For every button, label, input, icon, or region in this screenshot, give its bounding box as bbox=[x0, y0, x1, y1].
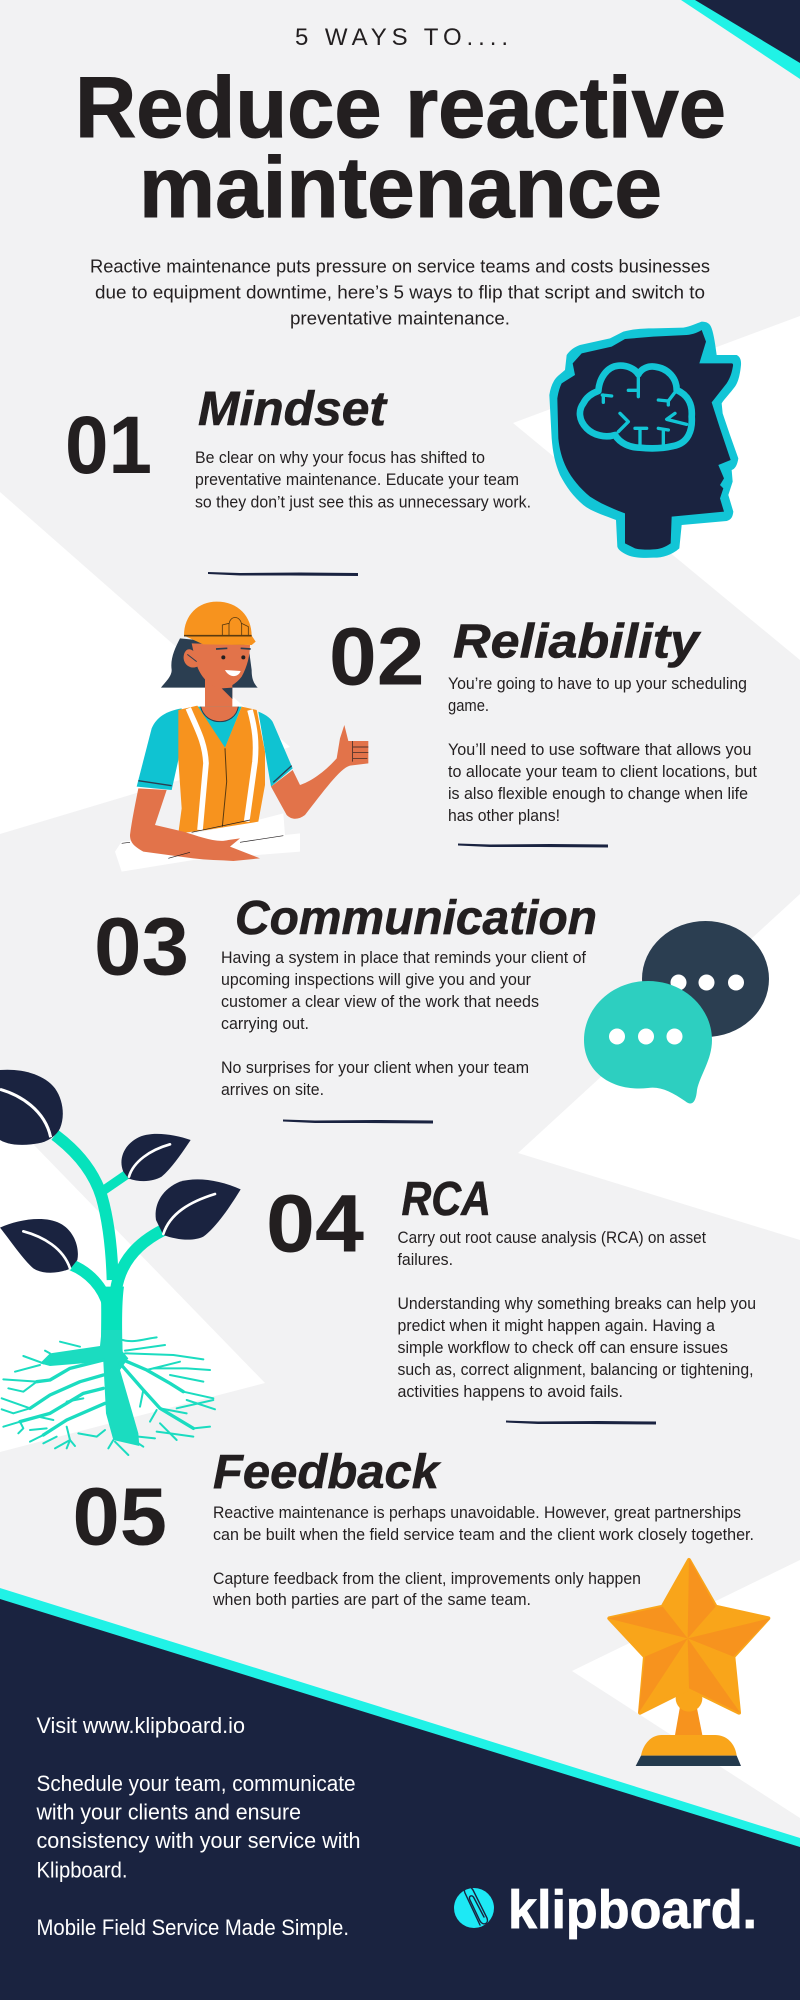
shirt bbox=[137, 708, 182, 790]
text block communication: Having a system in place that reminds your client of bbox=[221, 949, 586, 967]
heading rca: RCA bbox=[402, 1173, 491, 1226]
right arm and thumb bbox=[271, 725, 368, 819]
panel: 05 feedback bbox=[72, 1446, 754, 1609]
text block feedback: can be built when the field service team and the client work closely together. bbox=[213, 1526, 754, 1544]
footer text bbox=[36, 1713, 360, 1940]
footer band bbox=[0, 1588, 800, 2000]
text block mindset bbox=[195, 449, 531, 512]
panel: 01 mindset bbox=[65, 383, 531, 512]
hard hat bbox=[184, 602, 256, 645]
number 04: 04 bbox=[266, 1178, 364, 1270]
title bbox=[75, 60, 726, 236]
text block communication bbox=[221, 949, 586, 1099]
footer text: Klipboard. bbox=[36, 1858, 128, 1882]
divider bbox=[283, 1120, 433, 1124]
corner decoration bbox=[681, 0, 800, 79]
text block rca: such as, correct alignment, balancing or tightening, bbox=[398, 1361, 754, 1379]
number 01: 01 bbox=[65, 400, 152, 491]
footer text: Mobile Field Service Made Simple. bbox=[36, 1915, 349, 1940]
text block communication: customer a clear view of the work that needs bbox=[221, 993, 539, 1011]
paper roll bbox=[115, 813, 300, 872]
title: maintenance bbox=[139, 140, 662, 236]
hair bbox=[161, 638, 258, 688]
logo: klipboard: klipboard. bbox=[508, 1880, 757, 1940]
text block reliability: to allocate your team to client locations, but bbox=[448, 763, 757, 781]
text block rca: Carry out root cause analysis (RCA) on asset bbox=[398, 1229, 706, 1247]
vest bbox=[178, 706, 265, 833]
intro text bbox=[90, 256, 710, 328]
text block rca: activities happens to avoid fails. bbox=[398, 1383, 623, 1401]
heading mindset: Mindset bbox=[198, 383, 388, 436]
text block mindset: preventative maintenance. Educate your team bbox=[195, 471, 519, 489]
number 05: 05 bbox=[72, 1472, 167, 1562]
intro text: due to equipment downtime, here’s 5 ways to flip that script and switch to bbox=[95, 282, 705, 302]
heading reliability: Reliability bbox=[453, 616, 702, 668]
heading communication: Communication bbox=[235, 892, 597, 945]
text block reliability: You’re going to have to up your scheduling bbox=[448, 675, 747, 693]
footer text: consistency with your service with bbox=[36, 1828, 360, 1853]
text block reliability: has other plans! bbox=[448, 807, 560, 825]
intro text: preventative maintenance. bbox=[290, 308, 510, 328]
text block communication: upcoming inspections will give you and your bbox=[221, 971, 531, 989]
divider bbox=[208, 572, 358, 576]
panel: 04 rca bbox=[266, 1173, 756, 1401]
text block rca: Understanding why something breaks can help you bbox=[398, 1295, 756, 1313]
stems bbox=[55, 1135, 163, 1353]
divider bbox=[458, 844, 608, 848]
left arm bbox=[130, 788, 260, 861]
text block communication: No surprises for your client when your team bbox=[221, 1059, 529, 1077]
leaves bbox=[0, 1070, 241, 1273]
divider bbox=[506, 1420, 656, 1424]
icon: star trophy bbox=[608, 1558, 770, 1766]
text block reliability bbox=[448, 675, 757, 825]
illustration: plant with roots bbox=[0, 1070, 241, 1455]
text block mindset: so they don’t just see this as unnecessary work. bbox=[195, 494, 531, 512]
panel: 02 reliability bbox=[329, 612, 757, 825]
text block reliability: game. bbox=[448, 697, 489, 715]
face bbox=[184, 643, 250, 688]
text block rca: simple workflow to check off can ensure issues bbox=[398, 1339, 728, 1357]
text block reliability: is also flexible enough to change when life bbox=[448, 785, 748, 803]
icon: speech bubbles bbox=[584, 921, 769, 1104]
text block feedback: Reactive maintenance is perhaps unavoidable. However, great partnerships bbox=[213, 1504, 741, 1522]
heading feedback: Feedback bbox=[213, 1446, 441, 1499]
text block feedback: when both parties are part of the same team. bbox=[212, 1591, 531, 1609]
title: Reduce reactive bbox=[75, 60, 726, 156]
text block feedback: Capture feedback from the client, improvements only happen bbox=[213, 1570, 641, 1588]
text block rca bbox=[398, 1229, 756, 1401]
number 03: 03 bbox=[94, 902, 189, 992]
neck bbox=[205, 678, 238, 710]
text block mindset: Be clear on why your focus has shifted to bbox=[195, 449, 485, 467]
text block feedback bbox=[212, 1504, 754, 1609]
icon: paperclip circle bbox=[454, 1886, 494, 1928]
kicker heading: 5 WAYS TO.... bbox=[295, 24, 508, 51]
text block communication: arrives on site. bbox=[221, 1081, 324, 1099]
text block rca: predict when it might happen again. Having a bbox=[398, 1317, 716, 1335]
text block reliability: You’ll need to use software that allows you bbox=[448, 741, 752, 759]
footer text: Schedule your team, communicate bbox=[36, 1771, 356, 1796]
footer text: with your clients and ensure bbox=[36, 1800, 301, 1824]
text block communication: carrying out. bbox=[221, 1015, 309, 1033]
illustration: worker bbox=[115, 602, 368, 872]
footer text: Visit www.klipboard.io bbox=[36, 1713, 245, 1738]
number 02: 02 bbox=[329, 612, 424, 702]
intro text: Reactive maintenance puts pressure on service teams and costs businesses bbox=[90, 256, 710, 276]
roots bbox=[2, 1330, 215, 1455]
text block rca: failures. bbox=[398, 1251, 453, 1269]
icon: head with brain bbox=[549, 322, 741, 558]
panel: 03 communication bbox=[94, 892, 597, 1099]
